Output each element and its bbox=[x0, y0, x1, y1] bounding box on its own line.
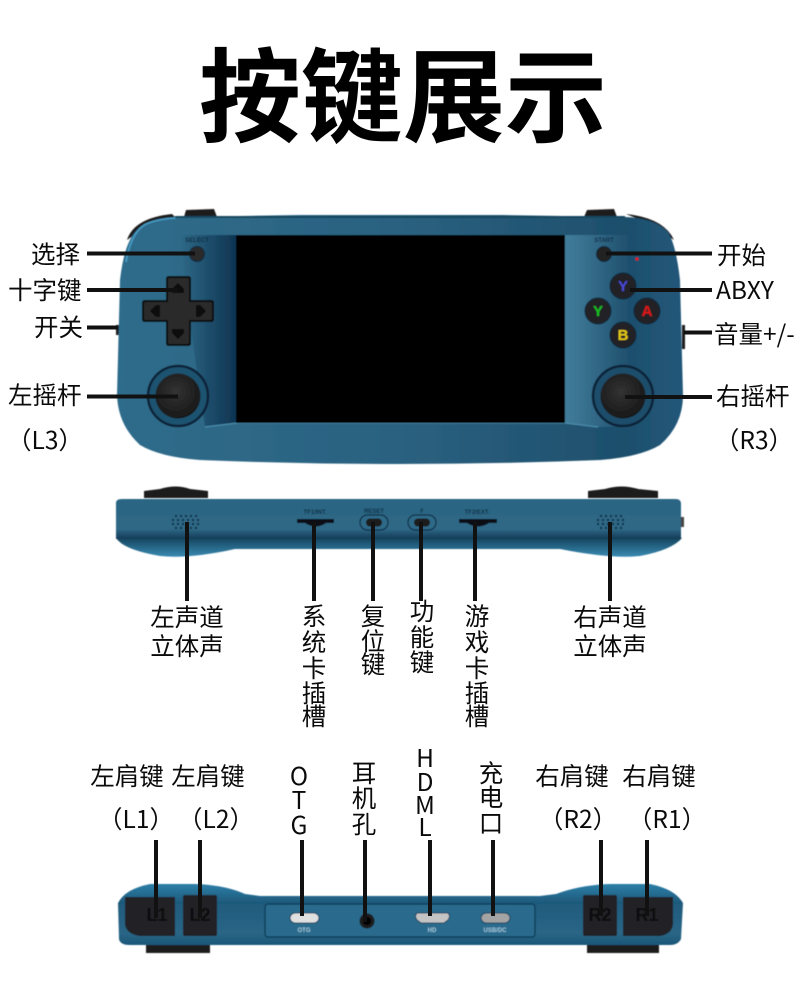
right panel tint bbox=[565, 235, 630, 427]
label: function key bbox=[410, 522, 434, 679]
label: L2 bbox=[171, 758, 254, 880]
label: R2 bbox=[535, 758, 617, 880]
label: function key: 功 bbox=[410, 593, 434, 628]
label: HDMI: H bbox=[416, 740, 434, 775]
right stick bbox=[593, 366, 653, 426]
select button bbox=[190, 246, 204, 262]
label: left speaker: 左声道 bbox=[150, 599, 224, 634]
OTG port bbox=[290, 913, 319, 934]
label: R1 bbox=[622, 758, 706, 880]
label: game card slot: 游 bbox=[465, 598, 489, 633]
top labels above rear view bbox=[90, 740, 706, 880]
label: left speaker: 立体声 bbox=[150, 628, 224, 663]
label: L1 bbox=[90, 758, 174, 880]
R2 button: R2 bbox=[588, 905, 612, 925]
label: system card slot: 统 bbox=[302, 624, 326, 659]
ABXY buttons: B bbox=[618, 327, 629, 344]
R1 button bbox=[623, 897, 673, 936]
rear view leader lines overlay bbox=[156, 880, 647, 922]
L2 button bbox=[183, 895, 217, 936]
label: charge port: 电 bbox=[479, 779, 503, 814]
ABXY buttons: Y bbox=[593, 303, 603, 320]
label: headphone jack: 机 bbox=[352, 780, 376, 815]
label: game card slot: 卡 bbox=[465, 650, 489, 685]
left stick bbox=[148, 366, 208, 426]
ABXY buttons: Y bbox=[618, 278, 628, 295]
label: game card slot: 戏 bbox=[465, 624, 489, 659]
underside lip bbox=[116, 538, 682, 557]
label: right speaker: 右声道 bbox=[573, 599, 647, 634]
label: R3: （R3） bbox=[715, 422, 793, 457]
speaker right bbox=[597, 515, 624, 529]
label: select: 选择 bbox=[31, 236, 80, 271]
side view labels and leader lines bbox=[150, 522, 647, 733]
label: d-pad: 十字键 bbox=[8, 272, 82, 307]
HDMI port: HD bbox=[428, 928, 437, 934]
label: OTG: G bbox=[291, 807, 307, 842]
ABXY buttons: A bbox=[642, 303, 653, 320]
label: headphone jack bbox=[352, 755, 376, 880]
label: ABXY: ABXY bbox=[716, 272, 775, 307]
label: L1: （L1） bbox=[98, 801, 174, 836]
screen bbox=[236, 235, 565, 423]
label: charge port bbox=[479, 755, 503, 880]
slot TF2: TF2/EXT. bbox=[464, 510, 490, 516]
label: volume: 音量+/- bbox=[714, 316, 795, 351]
slot TF1 bbox=[297, 510, 334, 526]
slot TF2 bbox=[459, 510, 497, 526]
label: HDMI: M bbox=[415, 787, 435, 822]
label: headphone jack: 耳 bbox=[352, 755, 376, 790]
label: system card slot: 卡 bbox=[302, 650, 326, 685]
label: L2: （L2） bbox=[178, 801, 254, 836]
label: game card slot: 插 bbox=[465, 675, 489, 710]
label: HDMI bbox=[415, 740, 435, 880]
label: left speaker bbox=[150, 522, 224, 663]
USB-C port bbox=[481, 913, 510, 934]
sticks under bbox=[146, 943, 659, 953]
start button bbox=[596, 246, 612, 262]
slot TF1: TF1/INT. bbox=[303, 510, 327, 516]
label: L2: 左肩键 bbox=[171, 758, 245, 793]
label: OTG: T bbox=[292, 782, 306, 817]
L2 button: L2 bbox=[189, 905, 211, 925]
front labels and leader lines bbox=[7, 236, 795, 457]
d-pad bbox=[143, 277, 213, 345]
label: system card slot bbox=[302, 522, 326, 733]
label: system card slot: 槽 bbox=[302, 698, 326, 733]
label: R1: （R1） bbox=[628, 801, 706, 836]
title: 按键展示 bbox=[199, 42, 607, 156]
label: system card slot: 系 bbox=[302, 598, 326, 633]
device: side view with card slots bbox=[116, 486, 684, 557]
speaker left bbox=[172, 515, 199, 529]
label: HDMI: L bbox=[418, 809, 432, 844]
bottom strip highlight bbox=[205, 423, 598, 427]
label: charge port: 充 bbox=[479, 755, 503, 790]
device: front view: START bbox=[594, 238, 614, 244]
label: R2: 右肩键 bbox=[535, 758, 609, 793]
label: headphone jack: 孔 bbox=[352, 806, 376, 841]
body bbox=[116, 499, 681, 539]
label: start: 开始 bbox=[717, 237, 766, 272]
R2 button bbox=[583, 895, 617, 936]
label: left stick: 左摇杆 bbox=[8, 377, 82, 412]
L1 button bbox=[125, 897, 175, 936]
label: R1: 右肩键 bbox=[622, 758, 696, 793]
label: L3: （L3） bbox=[7, 422, 83, 457]
label: power: 开关 bbox=[34, 309, 83, 344]
R1 button: R1 bbox=[635, 905, 659, 925]
label: function key: 键 bbox=[410, 644, 434, 679]
sticks on top bbox=[144, 486, 658, 498]
label: OTG: O bbox=[290, 758, 308, 793]
indicator led bbox=[635, 257, 639, 261]
device: front view: SELECT bbox=[185, 238, 209, 244]
label: power bbox=[34, 309, 118, 344]
label: system card slot: 插 bbox=[302, 675, 326, 710]
function button: F bbox=[420, 509, 424, 515]
body bbox=[118, 884, 683, 945]
port panel bbox=[265, 904, 535, 937]
label: HDMI: D bbox=[417, 764, 433, 799]
reset button: RESET bbox=[364, 509, 384, 515]
edge highlight bbox=[126, 218, 176, 262]
label: reset key: 位 bbox=[361, 623, 385, 658]
headphone jack bbox=[360, 914, 374, 928]
label: game card slot: 槽 bbox=[465, 698, 489, 733]
label: game card slot bbox=[465, 522, 489, 733]
shoulder buttons top bbox=[116, 209, 685, 349]
device: rear view with ports bbox=[118, 884, 683, 953]
label: reset key: 键 bbox=[361, 646, 385, 681]
label: reset key bbox=[361, 522, 385, 681]
function button bbox=[408, 509, 436, 530]
HDMI port bbox=[416, 913, 450, 934]
label: OTG bbox=[290, 758, 308, 880]
label: function key: 能 bbox=[410, 619, 434, 654]
label: right speaker bbox=[573, 522, 647, 663]
label: right speaker: 立体声 bbox=[573, 628, 647, 663]
L1 button: L1 bbox=[146, 905, 168, 925]
label: charge port: 口 bbox=[479, 805, 503, 840]
left panel shade bbox=[180, 235, 237, 427]
device: front view bbox=[116, 209, 685, 464]
label: L1: 左肩键 bbox=[90, 758, 164, 793]
label: R2: （R2） bbox=[539, 801, 617, 836]
ABXY buttons bbox=[585, 273, 660, 348]
label: reset key: 复 bbox=[361, 598, 385, 633]
label: right stick: 右摇杆 bbox=[716, 378, 790, 413]
OTG port: OTG bbox=[298, 928, 311, 934]
USB-C port: USB/DC bbox=[483, 928, 507, 934]
reset button bbox=[360, 509, 388, 530]
body shell bbox=[117, 215, 683, 464]
